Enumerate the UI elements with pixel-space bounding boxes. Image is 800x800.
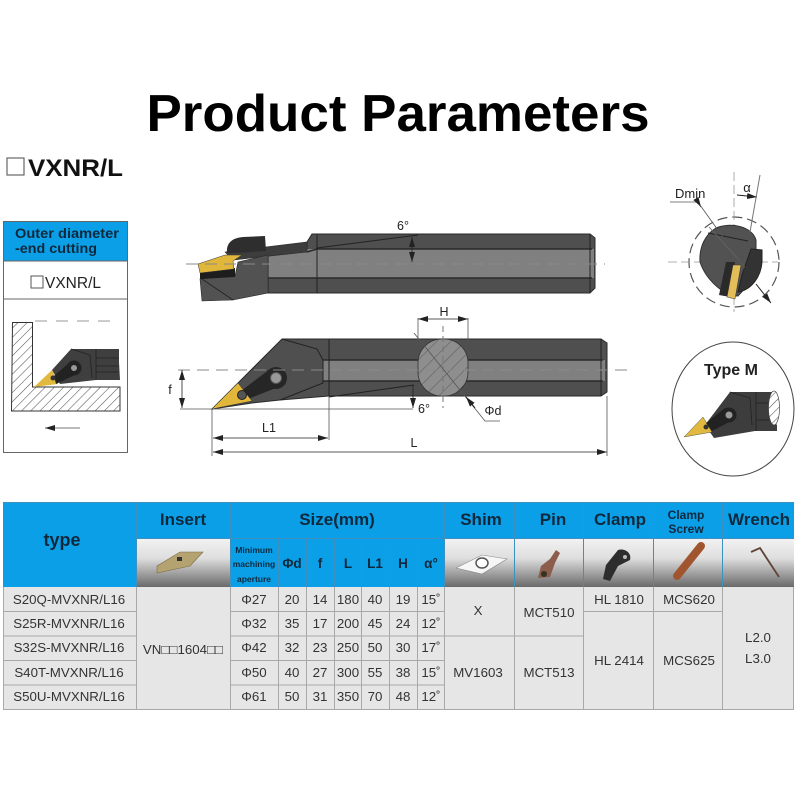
dimension H: H <box>439 305 449 319</box>
6 degree callout: 6° <box>397 219 409 233</box>
type column: S40T-MVXNR/L16 <box>14 665 124 680</box>
size rows: 19 <box>396 592 410 607</box>
dimension L: L <box>411 436 418 450</box>
size rows: 300 <box>337 665 359 680</box>
type column: S25R-MVXNR/L16 <box>13 616 125 631</box>
accessory cells: MCS620 <box>663 592 715 607</box>
size rows: 27 <box>313 665 327 680</box>
accessory cells: MCT510 <box>524 605 574 620</box>
side view tool <box>186 219 605 301</box>
size rows: 24 <box>396 616 410 631</box>
clamp <box>738 249 762 292</box>
size sub headers: L1 <box>367 556 383 571</box>
size rows: 14 <box>313 592 327 607</box>
icon: pin <box>538 550 560 578</box>
table header band <box>3 502 794 587</box>
size rows: 250 <box>337 640 359 655</box>
size rows: 23 <box>313 640 327 655</box>
size sub headers: aperture <box>237 574 271 584</box>
Dmin label: Dmin <box>675 186 705 201</box>
panel: outer diameter end cutting <box>4 222 128 452</box>
dimension phi d: Φd <box>485 404 502 418</box>
panel heading: -end cutting <box>15 240 97 256</box>
size rows: 48 <box>396 689 410 704</box>
lower head <box>200 255 268 301</box>
gold insert <box>198 255 242 273</box>
accessory cells: L3.0 <box>745 651 771 666</box>
size sub headers: H <box>398 556 408 571</box>
Type M circle <box>672 342 794 476</box>
accessory cells: HL 2414 <box>594 653 644 668</box>
size sub headers: f <box>318 556 323 571</box>
size rows: 50 <box>285 689 299 704</box>
size rows: 31 <box>313 689 327 704</box>
header labels: type <box>43 530 81 550</box>
size rows: 55 <box>368 665 382 680</box>
size rows: 40 <box>285 665 299 680</box>
dimension 6 degrees <box>413 385 430 416</box>
dimension H <box>418 305 468 340</box>
size rows: 350 <box>337 689 359 704</box>
panel label: VXNR/L <box>45 275 101 292</box>
header labels: Clamp <box>668 508 704 522</box>
size sub headers: Minimum <box>235 545 273 555</box>
size sub headers: L <box>344 556 352 571</box>
center line <box>186 263 605 265</box>
holder body <box>700 225 756 296</box>
icon: clamp screw <box>677 546 701 576</box>
header labels: Shim <box>460 510 502 529</box>
size sub headers: Φd <box>282 556 302 571</box>
type column: S20Q-MVXNR/L16 <box>13 592 125 607</box>
dimension L1: L1 <box>262 421 276 435</box>
shank <box>268 234 595 293</box>
size rows: 15˚ <box>421 592 441 607</box>
icon: shim <box>456 555 507 574</box>
header labels <box>43 508 790 550</box>
size rows: Φ42 <box>241 640 267 655</box>
size rows: Φ61 <box>241 689 267 704</box>
accessory cells <box>453 592 771 680</box>
dimension 6 degrees: 6° <box>418 402 430 416</box>
alpha label: α <box>743 180 751 195</box>
header labels: Size(mm) <box>299 510 375 529</box>
size rows: 40 <box>368 592 382 607</box>
header labels: Insert <box>160 510 206 529</box>
center lines <box>178 369 632 371</box>
front view tool <box>168 305 632 456</box>
Type M label: Type M <box>704 362 758 379</box>
size rows: 45 <box>368 616 382 631</box>
size rows: Φ27 <box>241 592 267 607</box>
subtitle: VXNR/L: VXNR/L <box>28 155 123 182</box>
clamp <box>227 236 266 253</box>
size rows: 12˚ <box>421 616 441 631</box>
hatched workpiece <box>12 322 120 411</box>
mini tool <box>34 349 120 387</box>
icon: insert <box>157 552 203 573</box>
title: Product Parameters <box>146 85 650 143</box>
image cells <box>137 539 794 587</box>
size rows: 32 <box>285 640 299 655</box>
type column: S50U-MVXNR/L16 <box>13 689 125 704</box>
icon: wrench <box>751 548 779 577</box>
neck <box>225 242 307 260</box>
size rows: 30 <box>396 640 410 655</box>
size rows: 15˚ <box>421 665 441 680</box>
size sub headers <box>233 545 438 584</box>
Dmin end view diagram <box>668 172 779 312</box>
panel heading: Outer diameter <box>15 225 120 241</box>
type column: S32S-MVXNR/L16 <box>14 640 124 655</box>
size rows: 20 <box>285 592 299 607</box>
accessory cells: MCS625 <box>663 653 715 668</box>
dimension f: f <box>168 383 172 397</box>
insert <box>719 262 735 297</box>
size rows: 70 <box>368 689 382 704</box>
feed arrow <box>45 427 80 429</box>
size rows: 17 <box>313 616 327 631</box>
header labels: Wrench <box>728 510 790 529</box>
accessory cells: L2.0 <box>745 630 771 645</box>
accessory cells: MV1603 <box>453 665 503 680</box>
accessory cells: X <box>474 603 483 618</box>
clamp <box>241 369 286 399</box>
Type M tool <box>684 391 780 438</box>
size rows: 12˚ <box>421 689 441 704</box>
size rows: 17˚ <box>421 640 441 655</box>
type column <box>13 592 125 704</box>
parameter table <box>3 502 794 710</box>
size rows: Φ32 <box>241 616 267 631</box>
icon: clamp <box>603 550 630 581</box>
dimension phi d <box>414 333 502 421</box>
header labels: Clamp <box>594 510 646 529</box>
insert code: VN□□1604□□ <box>143 642 223 657</box>
header labels: Pin <box>540 510 566 529</box>
6 degree callout <box>397 219 412 262</box>
cross section <box>418 339 468 396</box>
panel heading <box>4 222 127 261</box>
size rows: 35 <box>285 616 299 631</box>
size rows: Φ50 <box>241 665 267 680</box>
size sub headers: α° <box>424 556 438 571</box>
size rows: 180 <box>337 592 359 607</box>
table body <box>3 587 794 710</box>
size rows <box>241 592 441 704</box>
gold insert <box>212 383 252 409</box>
size sub headers: machining <box>233 559 275 569</box>
header labels: Screw <box>668 522 704 536</box>
dimension L1 <box>213 396 329 440</box>
size rows: 200 <box>337 616 359 631</box>
size rows: 50 <box>368 640 382 655</box>
size rows: 38 <box>396 665 410 680</box>
accessory cells: MCT513 <box>524 665 574 680</box>
accessory cells: HL 1810 <box>594 592 644 607</box>
